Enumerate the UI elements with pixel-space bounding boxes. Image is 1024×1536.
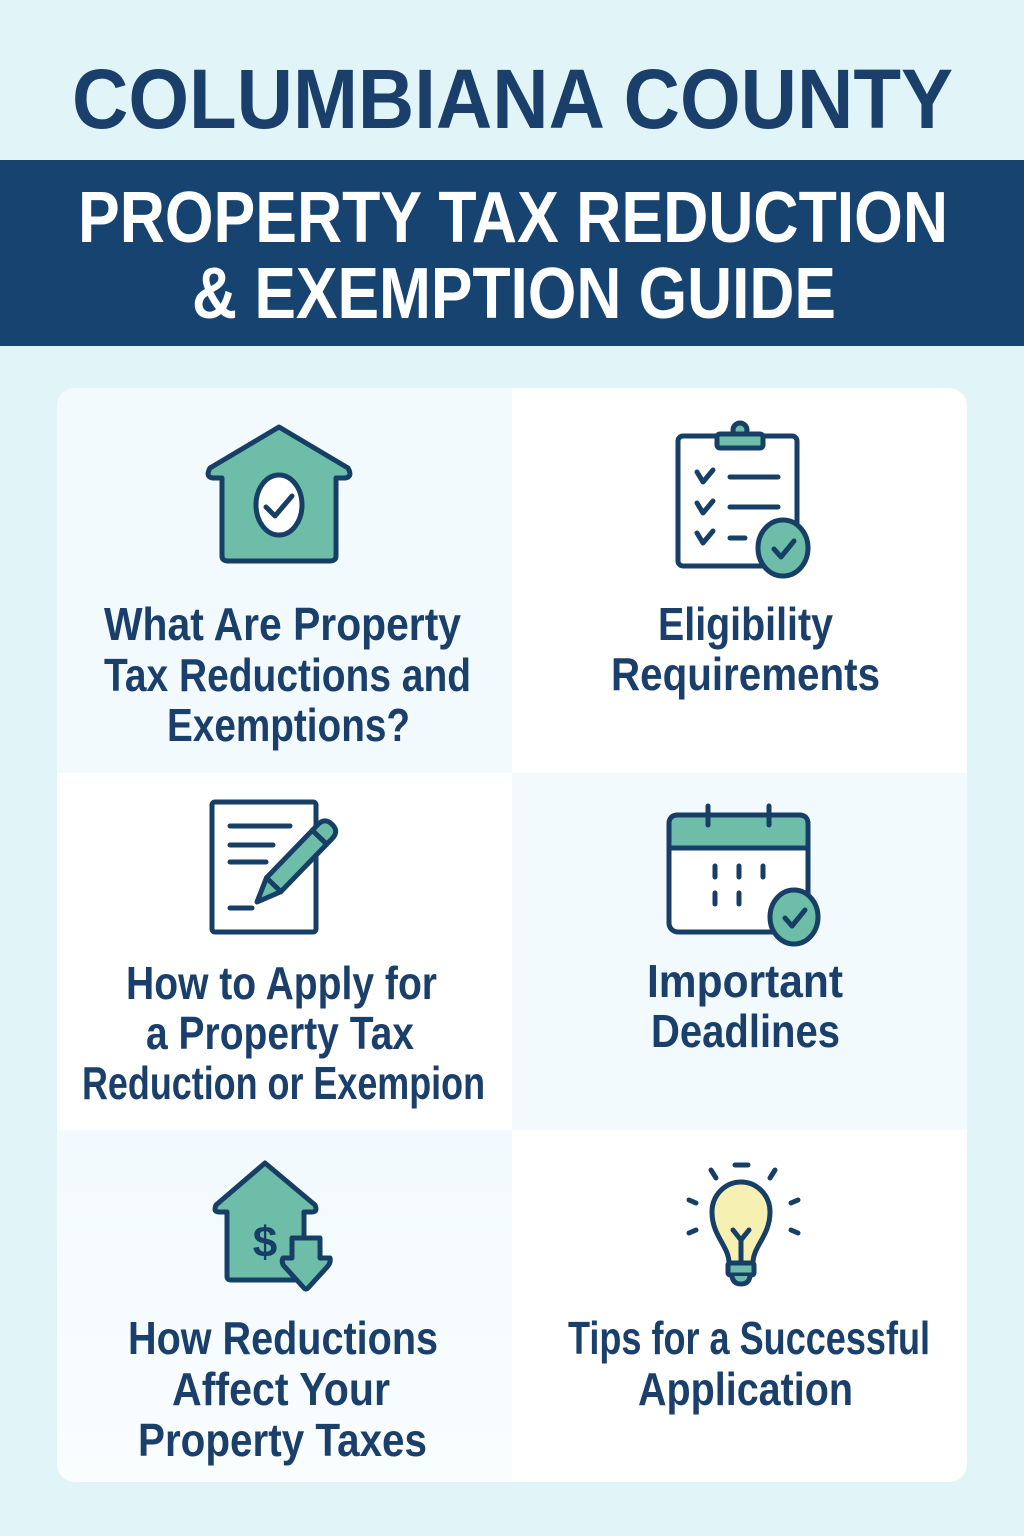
icon: house with dollar and down arrow: [212, 1160, 333, 1292]
cell tint: top left: [57, 388, 512, 773]
heading: how reductions affect: Property Taxes: [138, 1414, 427, 1466]
heading: how to apply: How to Apply for: [126, 957, 437, 1009]
heading: how reductions affect: [128, 1312, 438, 1466]
heading: tips for successful application: [568, 1312, 930, 1415]
card grid: [57, 388, 967, 1482]
heading: how to apply: [82, 957, 485, 1109]
title: COLUMBIANA COUNTY: [72, 52, 953, 146]
icon: clipboard checklist: [676, 420, 810, 578]
heading: what are property tax reductions: What Are Property: [104, 598, 461, 650]
heading: important deadlines: Deadlines: [651, 1005, 840, 1057]
heading: eligibility requirements: Eligibility: [658, 598, 833, 650]
heading: what are property tax reductions: [104, 598, 471, 751]
heading: how reductions affect: How Reductions: [128, 1312, 438, 1364]
heading: tips for successful application: Application: [638, 1363, 853, 1415]
icon: house with dollar and down arrow: $: [253, 1218, 277, 1267]
heading: eligibility requirements: Requirements: [611, 648, 880, 700]
heading: important deadlines: Important: [647, 955, 843, 1007]
heading: what are property tax reductions: Exemptions?: [167, 699, 410, 751]
heading: how to apply: a Property Tax: [146, 1007, 414, 1059]
banner: & EXEMPTION GUIDE: [192, 254, 836, 334]
heading: how reductions affect: Affect Your: [172, 1363, 390, 1415]
banner: [0, 160, 1024, 346]
icon: calendar with check: [666, 804, 820, 946]
icon: light bulb: [686, 1162, 800, 1286]
cell tint: bottom left: [57, 1130, 512, 1482]
icon: house with check: [206, 424, 352, 564]
heading: important deadlines: [647, 955, 843, 1057]
heading: eligibility requirements: [611, 598, 880, 700]
icon: document with pencil: [210, 800, 338, 934]
cell tint: middle right: [512, 773, 967, 1130]
